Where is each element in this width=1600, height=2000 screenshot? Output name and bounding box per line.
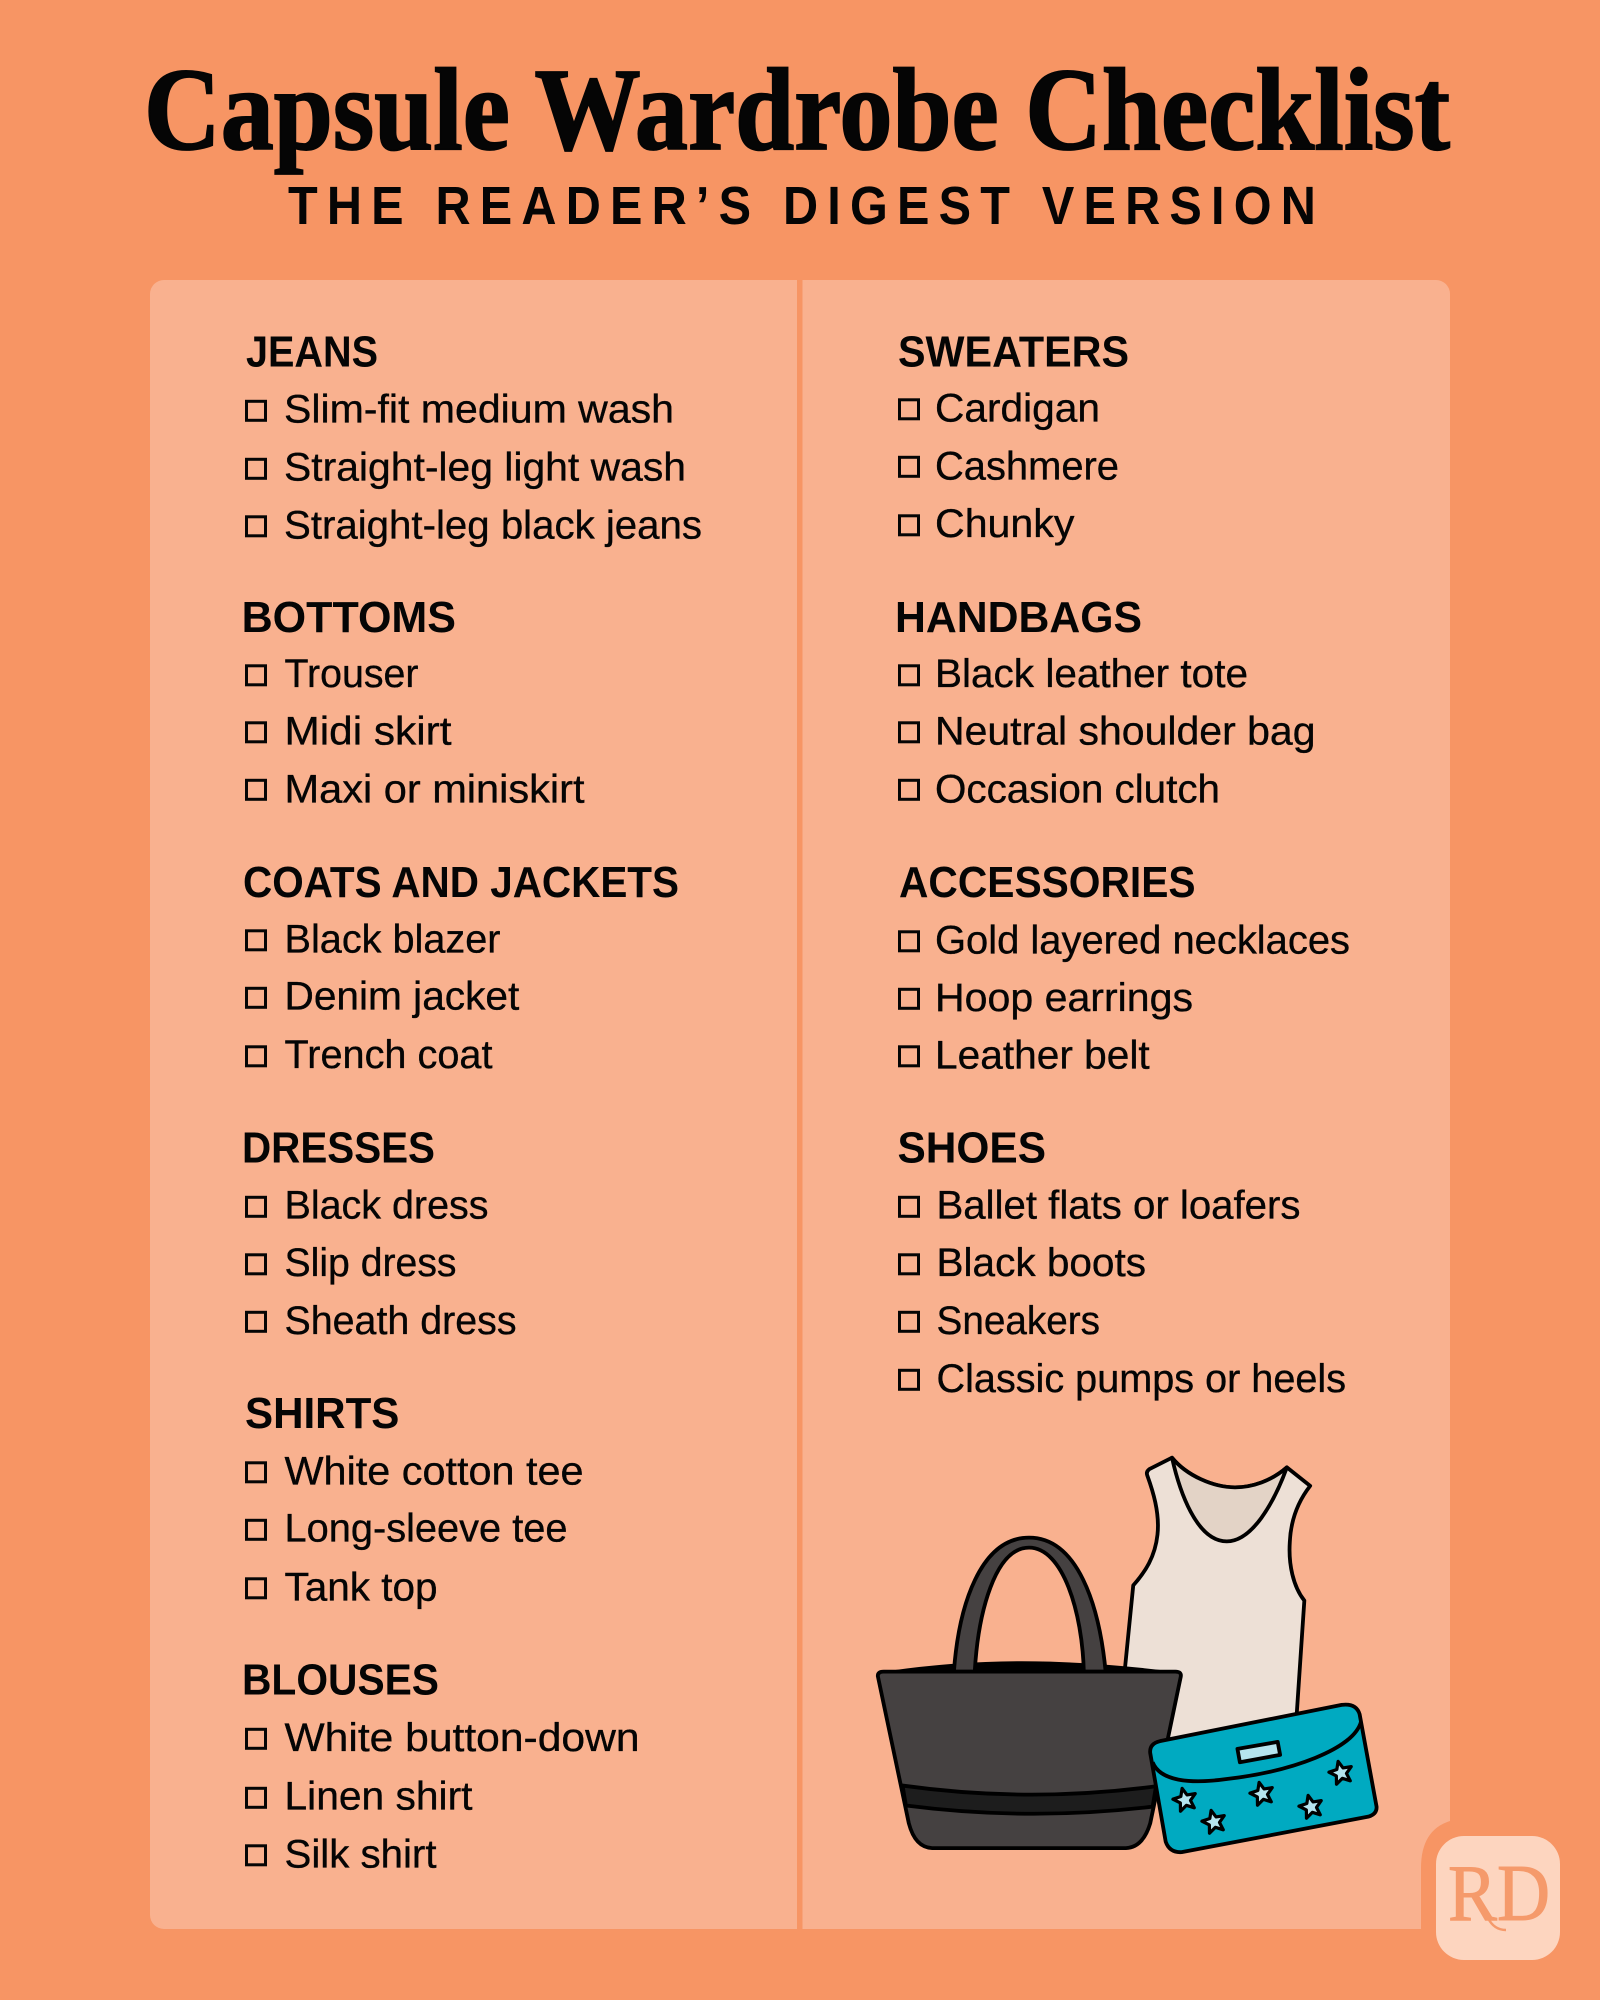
section: jeans	[246, 328, 702, 547]
section: sweaters	[898, 328, 1129, 546]
item: linen shirt: Linen shirt	[284, 1775, 472, 1819]
logo: RD badge	[1436, 1836, 1560, 1960]
item: straight-leg light wash: Straight-leg light wash	[284, 446, 686, 490]
panel: checklist card	[150, 280, 1450, 1929]
heading: jeans: JEANS	[246, 328, 378, 376]
heading: blouses: BLOUSES	[242, 1656, 439, 1705]
column: right checklist	[895, 328, 1350, 1401]
item: black blazer: Black blazer	[284, 917, 500, 961]
item: midi skirt: Midi skirt	[284, 709, 452, 753]
icon: clutch	[1150, 1705, 1377, 1852]
item: white button-down: White button-down	[284, 1716, 640, 1760]
item: slip dress: Slip dress	[284, 1241, 456, 1285]
section: blouses	[242, 1656, 640, 1876]
item: straight-leg black jeans: Straight-leg black jeans	[284, 503, 702, 547]
item: trouser: Trouser	[284, 652, 418, 696]
illustration: tank top, tote bag and clutch	[878, 1458, 1377, 1852]
item: long-sleeve tee: Long-sleeve tee	[284, 1507, 568, 1551]
heading: shoes: SHOES	[898, 1124, 1046, 1172]
section: shoes	[898, 1124, 1346, 1401]
item: occasion clutch: Occasion clutch	[935, 767, 1220, 811]
logo: RD badge: RD	[1448, 1850, 1550, 1938]
item: cardigan: Cardigan	[935, 386, 1100, 430]
item: black leather tote: Black leather tote	[935, 652, 1248, 696]
item: chunky: Chunky	[935, 502, 1074, 546]
item: denim jacket: Denim jacket	[284, 975, 519, 1019]
item: tank top: Tank top	[284, 1565, 438, 1609]
item: ballet flats or loafers: Ballet flats or loafers	[936, 1184, 1300, 1228]
icon: tote bag	[878, 1538, 1181, 1848]
section: bottoms	[242, 593, 584, 811]
item: classic pumps or heels: Classic pumps or heels	[936, 1357, 1346, 1401]
heading: dresses: DRESSES	[242, 1124, 435, 1172]
item: sheath dress: Sheath dress	[284, 1299, 516, 1343]
item: leather belt: Leather belt	[935, 1033, 1150, 1077]
heading: accessories: ACCESSORIES	[899, 858, 1196, 907]
item: neutral shoulder bag: Neutral shoulder bag	[935, 709, 1316, 753]
icon: tank top	[1125, 1458, 1310, 1742]
section: dresses	[242, 1124, 516, 1343]
section: accessories	[899, 858, 1350, 1077]
column: left checklist	[242, 328, 702, 1876]
title: Capsule Wardrobe Checklist	[144, 44, 1450, 175]
subtitle: THE READER’S DIGEST VERSION	[288, 175, 1316, 236]
section: shirts	[245, 1389, 584, 1609]
heading: bottoms: BOTTOMS	[242, 593, 456, 642]
item: sneakers: Sneakers	[936, 1299, 1100, 1343]
item: maxi or miniskirt: Maxi or miniskirt	[284, 767, 584, 811]
heading: sweaters: SWEATERS	[898, 328, 1129, 376]
heading: coats and jackets: COATS AND JACKETS	[243, 858, 679, 907]
item: slim-fit medium wash: Slim-fit medium wash	[284, 388, 674, 432]
section: handbags	[895, 593, 1316, 811]
item: gold layered necklaces: Gold layered necklaces	[935, 919, 1350, 963]
heading: handbags: HANDBAGS	[895, 593, 1142, 642]
item: black boots: Black boots	[936, 1241, 1146, 1285]
item: cashmere: Cashmere	[935, 444, 1119, 488]
item: trench coat: Trench coat	[284, 1033, 492, 1077]
item: white cotton tee: White cotton tee	[284, 1449, 584, 1493]
item: hoop earrings: Hoop earrings	[935, 976, 1193, 1020]
heading: shirts: SHIRTS	[245, 1389, 399, 1438]
section: coats and jackets	[243, 858, 679, 1077]
item: silk shirt: Silk shirt	[284, 1832, 436, 1876]
item: black dress: Black dress	[284, 1184, 488, 1228]
